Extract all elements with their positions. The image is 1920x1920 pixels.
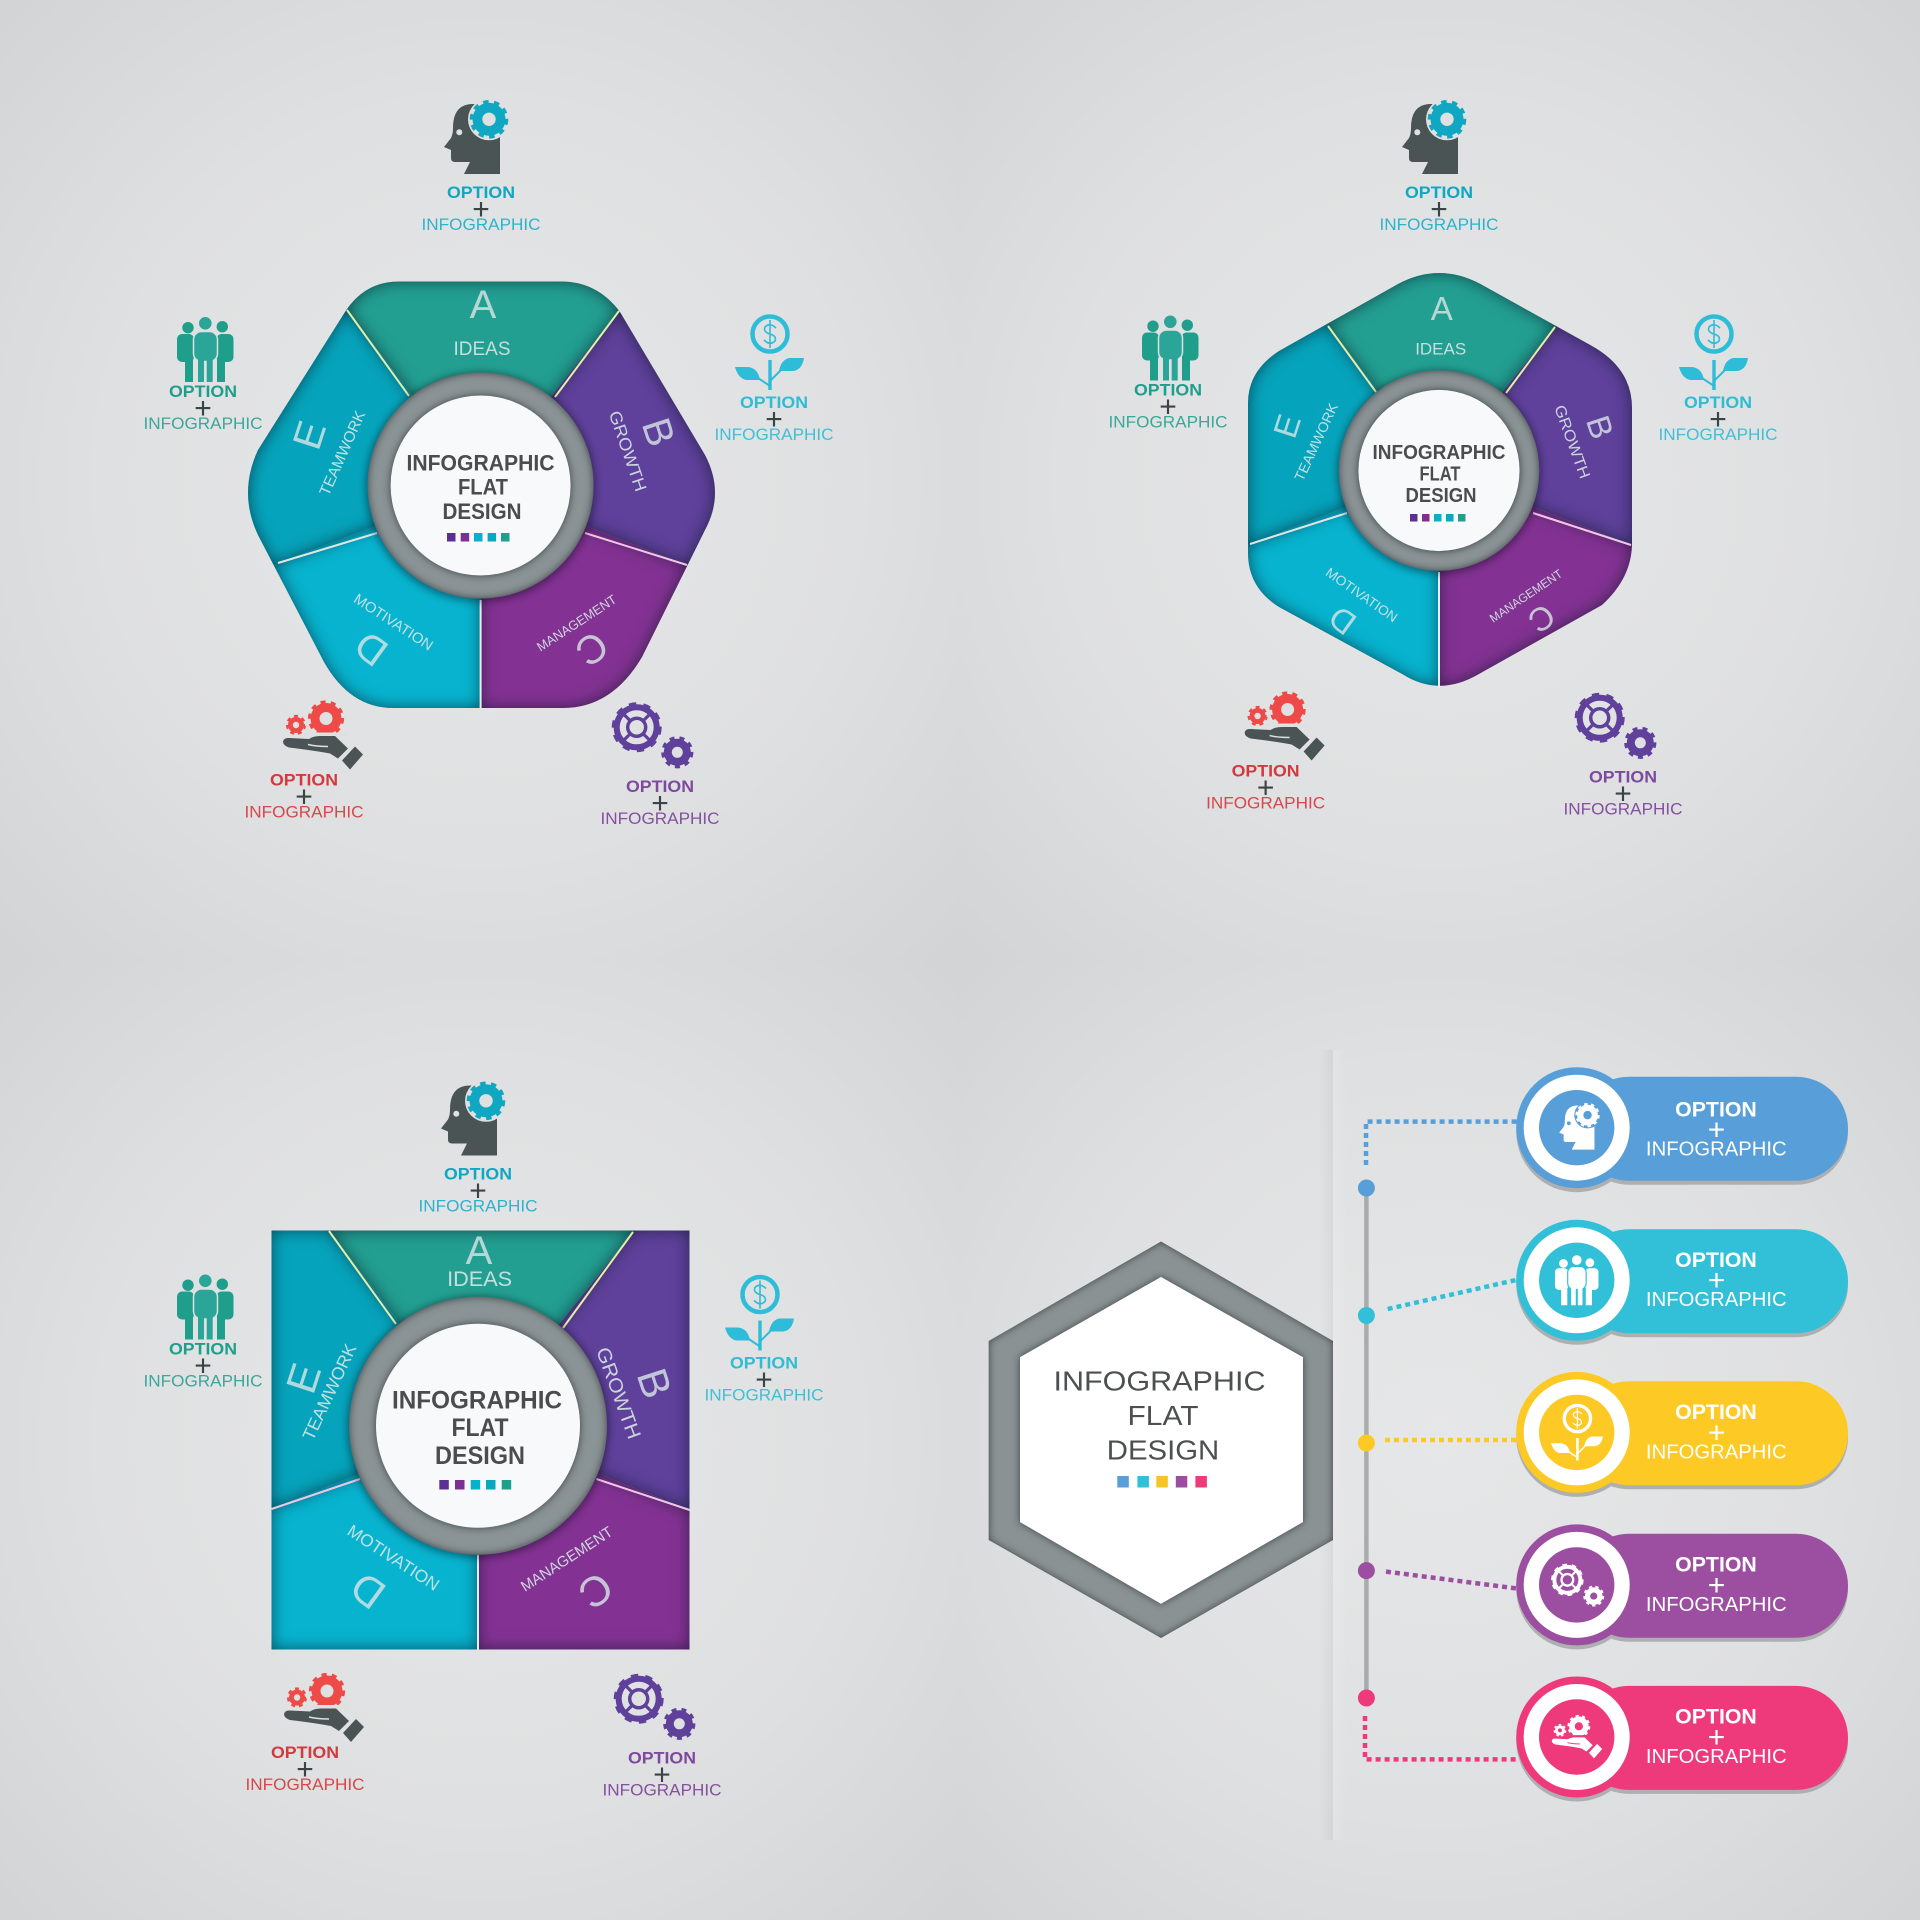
option: gears icon: INFOGRAPHIC	[601, 809, 719, 828]
option pill: purple gears	[1516, 1524, 1848, 1649]
center ring and title: FLAT	[452, 1414, 508, 1442]
panel: rounded hexagon flat-top diagram	[145, 100, 833, 824]
center ring and title: DESIGN	[1406, 485, 1476, 507]
option: head icon: INFOGRAPHIC	[1380, 215, 1498, 234]
segment E: teamwork: TEAMWORK	[298, 1340, 361, 1443]
segment E: teamwork	[272, 1230, 416, 1508]
option: gears icon: INFOGRAPHIC	[1564, 800, 1682, 818]
option: head icon: OPTION	[444, 1164, 512, 1184]
option: head icon: +	[472, 193, 490, 226]
option: plant icon: OPTION	[1684, 393, 1752, 412]
segment A: ideas: IDEAS	[447, 1268, 512, 1291]
option pill: pink hand: INFOGRAPHIC	[1646, 1746, 1787, 1768]
center ring and title	[366, 372, 596, 602]
option: head icon: +	[469, 1174, 487, 1208]
option: plant icon: +	[765, 403, 783, 436]
segment B: growth: GROWTH	[591, 1344, 645, 1442]
option pill: teal people	[1516, 1220, 1848, 1345]
segment E: teamwork: E	[285, 416, 335, 455]
option: hand icon: INFOGRAPHIC	[245, 802, 363, 822]
segment A: ideas	[1326, 273, 1556, 408]
option: people icon: +	[194, 1350, 212, 1382]
option: hand icon: OPTION	[1232, 762, 1300, 780]
segment B: growth: B	[1579, 411, 1621, 443]
segment D: motivation	[272, 1464, 478, 1650]
option pill: pink hand	[1516, 1676, 1848, 1802]
option: gears icon: INFOGRAPHIC	[603, 1780, 721, 1800]
option: people icon: +	[1159, 390, 1177, 424]
option: plant icon	[1658, 316, 1778, 444]
option: plant icon: +	[755, 1364, 773, 1396]
segment E: teamwork: TEAMWORK	[1291, 400, 1341, 483]
option: head icon	[422, 98, 540, 234]
center ring and title	[347, 1296, 609, 1558]
segment D: motivation	[274, 518, 481, 708]
center ring and title: INFOGRAPHIC	[406, 450, 555, 476]
segment A: ideas	[328, 1230, 634, 1346]
option pill: pink hand: +	[1708, 1721, 1725, 1754]
option: head icon: +	[1430, 193, 1448, 226]
segment C: management: MANAGEMENT	[1487, 566, 1566, 625]
option: people icon	[1108, 316, 1228, 432]
option: hand icon: +	[296, 1753, 314, 1786]
timeline	[1358, 1122, 1517, 1759]
option pill: blue head: INFOGRAPHIC	[1646, 1138, 1787, 1160]
option: head icon	[418, 1080, 538, 1216]
option: gears icon: OPTION	[628, 1748, 696, 1768]
option: plant icon: INFOGRAPHIC	[1659, 425, 1777, 444]
option: hand icon: INFOGRAPHIC	[1206, 794, 1325, 812]
center ring and title	[1337, 370, 1541, 574]
option pill: teal people: +	[1708, 1264, 1725, 1297]
segment A: ideas: A	[1431, 290, 1453, 327]
segment E: teamwork: TEAMWORK	[317, 408, 369, 498]
option: people icon: INFOGRAPHIC	[144, 1372, 262, 1390]
segment C: management: MANAGEMENT	[534, 592, 619, 654]
option: people icon: INFOGRAPHIC	[1109, 412, 1227, 432]
option: people icon: +	[194, 392, 212, 425]
center ring and title: INFOGRAPHIC	[392, 1386, 562, 1414]
segment A: ideas	[346, 282, 620, 415]
option: head icon: OPTION	[1405, 183, 1473, 202]
option pill: yellow plant: INFOGRAPHIC	[1646, 1441, 1787, 1463]
segment D: motivation: D	[347, 622, 396, 674]
segment C: management	[1439, 500, 1632, 686]
option: head icon	[1380, 98, 1498, 234]
option pill: pink hand: OPTION	[1675, 1706, 1757, 1729]
segment C: management: C	[567, 622, 616, 674]
panel: timeline with hexagon	[989, 1050, 1848, 1840]
option: plant icon: +	[1709, 403, 1727, 436]
segment A: ideas: IDEAS	[454, 339, 510, 360]
option: people icon: OPTION	[1134, 380, 1202, 400]
segment A: ideas: A	[470, 283, 497, 327]
segment C: management	[478, 1464, 690, 1650]
option: plant icon: OPTION	[740, 393, 808, 412]
segment D: motivation: MOTIVATION	[344, 1521, 443, 1595]
option: people icon: OPTION	[169, 1340, 237, 1358]
option: gears icon: +	[1614, 778, 1632, 810]
option pill: purple gears: +	[1708, 1569, 1725, 1602]
segment C: management	[480, 518, 688, 708]
center ring and title: INFOGRAPHIC	[1372, 442, 1506, 464]
segment E: teamwork: E	[1266, 410, 1308, 442]
option: people icon	[144, 1274, 262, 1390]
segment D: motivation: D	[1322, 599, 1363, 643]
option: hand icon	[1206, 693, 1325, 812]
segment D: motivation: MOTIVATION	[350, 591, 435, 654]
option: plant icon	[714, 316, 834, 444]
option: people icon: INFOGRAPHIC	[144, 414, 262, 433]
option pill: yellow plant: +	[1708, 1416, 1725, 1449]
segment B: growth: GROWTH	[1550, 403, 1593, 481]
option: gears icon	[1564, 695, 1682, 818]
segment C: management: C	[1521, 597, 1562, 641]
option: head icon: OPTION	[447, 183, 515, 202]
option: hand icon	[244, 702, 364, 822]
option pill: blue head: +	[1708, 1114, 1725, 1146]
option: plant icon: INFOGRAPHIC	[705, 1386, 823, 1404]
hexagon title	[989, 1242, 1333, 1638]
option: people icon: OPTION	[169, 382, 237, 401]
segment E: teamwork	[1248, 324, 1390, 545]
option: people icon	[144, 317, 262, 433]
option: plant icon: INFOGRAPHIC	[715, 425, 833, 444]
option: gears icon	[602, 1676, 722, 1800]
segment A: ideas: A	[466, 1229, 493, 1273]
segment E: teamwork	[248, 310, 426, 565]
segment B: growth	[1490, 326, 1632, 546]
segment D: motivation	[1248, 500, 1439, 686]
option pill: yellow plant: OPTION	[1675, 1401, 1757, 1424]
option: gears icon: +	[651, 787, 669, 820]
option: gears icon: OPTION	[626, 777, 694, 796]
panel: square diagram	[144, 1080, 824, 1800]
option: hand icon	[246, 1674, 364, 1794]
option: plant icon: OPTION	[730, 1354, 798, 1372]
option: gears icon: OPTION	[1589, 768, 1657, 786]
option: hand icon: +	[1257, 772, 1274, 804]
hexagon title: INFOGRAPHIC	[1054, 1366, 1266, 1396]
center ring and title: FLAT	[1420, 464, 1460, 486]
option pill: blue head	[1516, 1067, 1848, 1192]
option: gears icon: +	[653, 1758, 671, 1792]
option: hand icon: OPTION	[271, 1743, 339, 1762]
option: hand icon: +	[295, 780, 313, 814]
option: plant icon	[704, 1277, 824, 1404]
center ring and title: DESIGN	[435, 1442, 525, 1470]
option pill: teal people: OPTION	[1675, 1249, 1757, 1272]
option: head icon: INFOGRAPHIC	[422, 215, 540, 234]
option pill: purple gears: INFOGRAPHIC	[1646, 1594, 1787, 1616]
panel: pointy-top hexagon diagram	[1100, 98, 1800, 819]
option: gears icon	[600, 704, 720, 828]
center ring and title: FLAT	[458, 474, 509, 500]
segment B: growth	[536, 310, 715, 566]
option: hand icon: OPTION	[270, 770, 338, 790]
segment A: ideas: IDEAS	[1415, 340, 1466, 358]
segment B: growth	[542, 1230, 690, 1509]
segment C: management: C	[570, 1563, 622, 1619]
segment B: growth: B	[628, 1363, 681, 1404]
option pill: yellow plant	[1516, 1372, 1848, 1497]
segment B: growth: GROWTH	[605, 408, 650, 494]
center ring and title: DESIGN	[442, 499, 522, 524]
segment B: growth: B	[633, 413, 683, 452]
option pill: teal people: INFOGRAPHIC	[1646, 1289, 1787, 1311]
option pill: purple gears: OPTION	[1675, 1554, 1757, 1576]
segment C: management: MANAGEMENT	[518, 1523, 616, 1595]
option: head icon: INFOGRAPHIC	[419, 1196, 537, 1216]
hexagon title: FLAT	[1128, 1400, 1198, 1431]
segment D: motivation: D	[342, 1563, 394, 1619]
segment E: teamwork: E	[277, 1358, 330, 1399]
option pill: blue head: OPTION	[1675, 1099, 1757, 1122]
segment D: motivation: MOTIVATION	[1323, 565, 1400, 625]
hexagon title: DESIGN	[1107, 1434, 1219, 1466]
option: hand icon: INFOGRAPHIC	[246, 1775, 364, 1794]
